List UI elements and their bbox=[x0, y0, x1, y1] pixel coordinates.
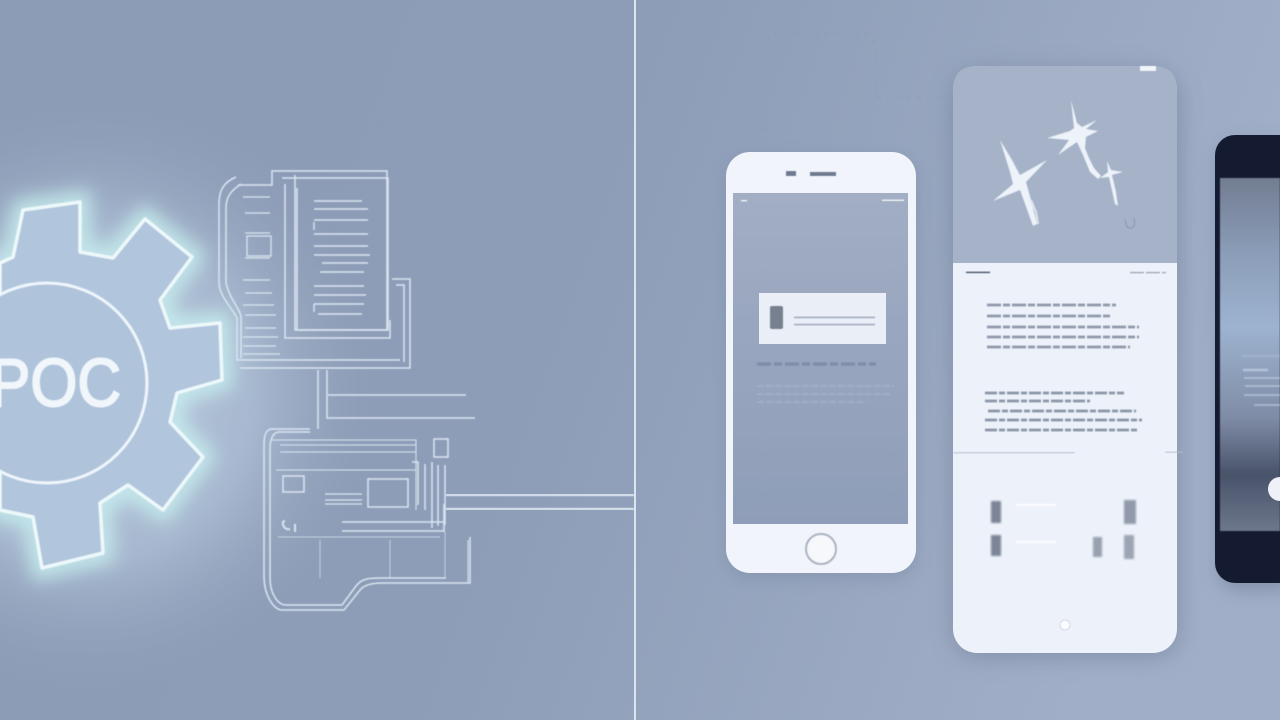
document text lines bbox=[314, 201, 370, 314]
faint dashed outline bbox=[766, 34, 940, 150]
blueprint: upper document bbox=[219, 171, 410, 368]
small labels bbox=[991, 500, 1136, 559]
center phone bbox=[953, 66, 1183, 656]
app panel bbox=[953, 66, 1177, 653]
phone card bbox=[759, 293, 886, 344]
white phone bbox=[726, 152, 916, 578]
fold line bbox=[953, 452, 1183, 453]
app header labels bbox=[966, 272, 1166, 273]
phone body bbox=[726, 152, 916, 573]
first paragraph bbox=[987, 305, 1139, 347]
blueprint: link bar to divider bbox=[446, 495, 634, 509]
second paragraph bbox=[985, 393, 1142, 430]
dark phone bbox=[1215, 135, 1280, 590]
phone caption lines bbox=[757, 364, 894, 402]
icon: glowing POC gear bbox=[0, 202, 222, 568]
star sketch bbox=[993, 100, 1123, 226]
status marks bbox=[741, 200, 904, 201]
dark phone screen bbox=[1220, 178, 1280, 531]
phone speaker bbox=[786, 171, 836, 176]
dark phone caption lines bbox=[1242, 356, 1280, 405]
blueprint: lower device bbox=[264, 429, 470, 610]
phone home button bbox=[806, 534, 836, 564]
dark phone body bbox=[1215, 135, 1280, 583]
blueprint: connector and upper rails bbox=[318, 370, 475, 429]
dark phone button bbox=[1268, 477, 1280, 501]
phone screen bbox=[733, 193, 908, 524]
panel home button bbox=[1060, 620, 1070, 630]
app image header bbox=[953, 66, 1177, 263]
gear inner ring bbox=[0, 283, 147, 483]
sidebar text lines bbox=[243, 197, 280, 354]
vertical divider bbox=[634, 0, 636, 720]
